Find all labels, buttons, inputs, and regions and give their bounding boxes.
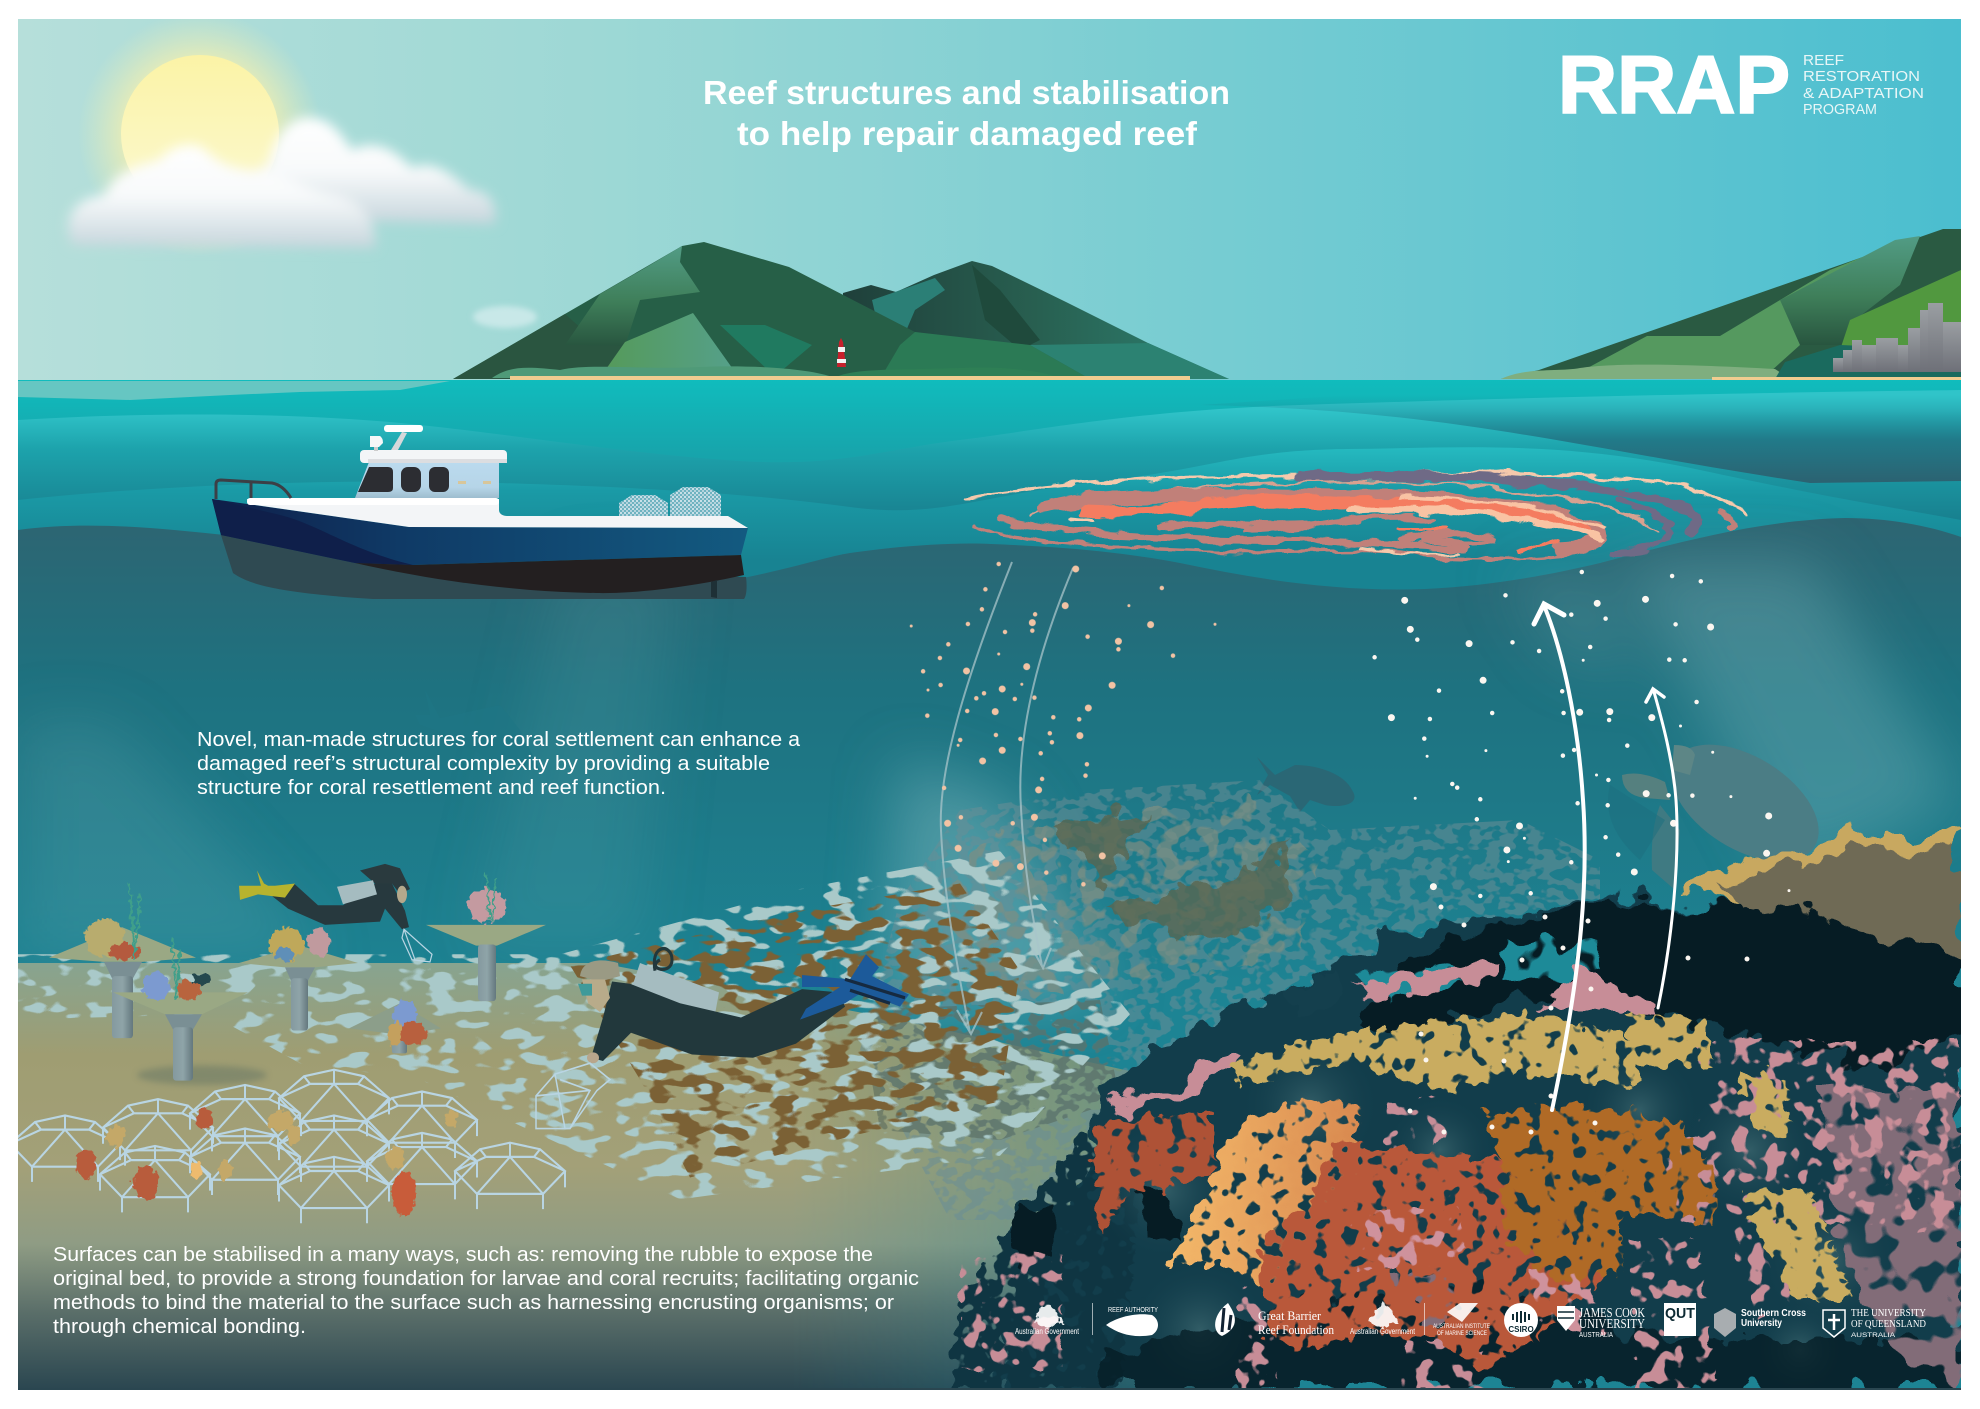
teal gap in reef: [1355, 940, 1600, 1000]
reef dark shadows: [1010, 905, 1961, 1390]
lighthouse: [837, 338, 846, 367]
logo: reef authority: [1106, 1307, 1158, 1336]
logo: James Cook University: UNIVERSITY: [1579, 1317, 1645, 1332]
reef lower-left speckled fringe: [950, 1130, 1140, 1390]
stern rail: [216, 480, 291, 499]
logo: Australian Institute of Marine Science: OF MARINE SCIENCE: [1437, 1330, 1487, 1337]
logo: University of Queensland: [1823, 1307, 1926, 1339]
yellow corals: [1230, 1013, 1852, 1300]
hoses: [654, 949, 672, 971]
peach coral spawn particles: [911, 564, 1215, 884]
logo wordmark: & ADAPTATION: [1803, 85, 1924, 102]
structure 3: [239, 927, 358, 1031]
distant rubble mound: [860, 780, 1600, 1230]
RRAP logo: RRAP: [1558, 40, 1790, 131]
pedestal structures: [49, 873, 546, 1085]
face: [397, 886, 407, 903]
deck: [247, 499, 748, 528]
wire sphere: [536, 1063, 610, 1129]
reef teal glows: [1095, 1035, 1900, 1400]
light rays: [18, 560, 1961, 1010]
logo: Southern Cross University: University: [1741, 1318, 1782, 1329]
body: [591, 982, 845, 1061]
logo wordmark: PROGRAM: [1803, 101, 1877, 118]
logo: Great Barrier Reef Foundation: [1215, 1303, 1334, 1337]
brown rubble patches: [570, 884, 1020, 1178]
logo: Great Barrier Reef Foundation: Great Barrier: [1258, 1308, 1322, 1323]
right island: [1501, 229, 1962, 380]
logo: CSIRO: CSIRO: [1508, 1325, 1534, 1334]
logo: James Cook University: JAMES COOK: [1579, 1306, 1645, 1321]
white particles over reef: [1410, 907, 1747, 1132]
light orange coral: [1170, 1100, 1360, 1290]
logo: Southern Cross University: Southern Cross: [1741, 1308, 1806, 1319]
cabin roof: [360, 450, 507, 463]
hand: [587, 1052, 599, 1063]
geodesic dome net: [10, 1070, 565, 1223]
pink spots on coral: [1350, 1210, 1610, 1340]
text: surface stabilisation: [53, 1244, 919, 1338]
orange corals: [1090, 1100, 1720, 1370]
far wave: [18, 390, 1961, 520]
logo: University of Queensland: OF QUEENSLAND: [1851, 1318, 1926, 1330]
logo: QUT: QUT: [1665, 1305, 1695, 1322]
bottom edge shade: [18, 1388, 1961, 1390]
logo: University of Queensland: AUSTRALIA: [1851, 1333, 1895, 1339]
hull: [212, 499, 748, 565]
sun: [88, 21, 311, 188]
structure 1: [49, 884, 196, 1038]
pink corals: [963, 962, 1961, 1390]
main red coral: [1260, 1140, 1610, 1370]
RRAP logo: [1558, 40, 1924, 131]
title: [703, 74, 1230, 152]
red orange coral left: [1090, 1110, 1214, 1235]
boat: [212, 425, 748, 599]
logo: University of Queensland: THE UNIVERSITY: [1851, 1307, 1926, 1319]
logo: Australian Government 2: [1350, 1303, 1416, 1336]
city skyline: [1833, 303, 1961, 372]
cabin: [355, 462, 499, 498]
hair and head: [580, 960, 620, 982]
fins: [800, 954, 909, 1020]
logo wordmark: REEF: [1803, 52, 1844, 69]
boat underwater shadow: [221, 535, 747, 599]
small diver: [239, 864, 432, 962]
logo wordmark: RESTORATION: [1803, 68, 1920, 85]
reef outcrop left: [1290, 965, 1350, 1030]
faint down arrows for coral spawn settlement: [941, 562, 1073, 1034]
tank: [337, 880, 377, 904]
underwater body: [18, 518, 1961, 1390]
mast and radar: [391, 432, 407, 450]
large upward arrow: [1534, 604, 1585, 1110]
logo: Australian Institute of Marine Science: AUSTRALIAN INSTITUTE: [1433, 1323, 1490, 1330]
logo: CSIRO: [1504, 1303, 1538, 1337]
logo: reef authority: REEF AUTHORITY: [1108, 1307, 1158, 1314]
sun reflection on water: [18, 381, 450, 400]
text: surface stabilisation: through chemical bonding.: [53, 1316, 306, 1338]
logo: Great Barrier Reef Foundation: Reef Foundation: [1258, 1322, 1334, 1337]
small corals on net: [76, 1107, 457, 1216]
text: surface stabilisation: methods to bind the material to the surface such as harnessing encrusting organisms; or: [53, 1292, 894, 1314]
mid wave: [18, 447, 1961, 544]
faint background shark: [415, 690, 540, 770]
bow panel: [212, 499, 413, 565]
rubble field, stretched to the seabed perspective: [18, 851, 1130, 1199]
propeller: [711, 580, 717, 598]
title: Reef structures and stabilisation: [703, 74, 1230, 111]
sky: [18, 19, 1961, 381]
hair: [360, 864, 410, 894]
text: novel structures: Novel, man-made structures for coral settlement can enhance a: [197, 729, 801, 751]
clouds: [68, 118, 496, 248]
structure 2: [113, 938, 267, 1085]
pale rubble patches: [18, 851, 1130, 1199]
tank: [632, 963, 719, 1014]
algal slick: [965, 473, 1748, 558]
body: [270, 884, 409, 929]
distant small cloud: [473, 306, 537, 328]
mauve coral: [1385, 1087, 1961, 1390]
sand seabed: [18, 963, 1260, 1390]
logo: QUT: [1664, 1303, 1696, 1336]
structure 4: [426, 873, 546, 1001]
small upward arrow: [1646, 689, 1677, 1008]
logo: Australian Institute of Marine Science: [1433, 1303, 1490, 1337]
logo: James Cook University: AUSTRALIA: [1579, 1332, 1613, 1339]
structure 5: [349, 1000, 441, 1053]
rear mountain: [840, 261, 1229, 379]
logo: Australian Government: Australian Government: [1015, 1327, 1080, 1336]
logo: Southern Cross University: [1714, 1308, 1806, 1337]
logo: Australian Government: [1015, 1303, 1080, 1336]
logo: James Cook University: [1557, 1306, 1645, 1339]
text: novel structures: damaged reef’s structural complexity by providing a suitable: [197, 753, 770, 775]
large diver: [536, 949, 909, 1129]
logo: Australian Government 2: Australian Government: [1350, 1327, 1416, 1336]
text: novel structures: structure for coral resettlement and reef function.: [197, 777, 666, 799]
title: to help repair damaged reef: [737, 115, 1198, 152]
gold brown coral: [1484, 1105, 1720, 1280]
khaki rock top right: [1690, 835, 1961, 955]
reef mass base: [1000, 890, 1961, 1390]
main island: [453, 242, 1229, 380]
text: surface stabilisation: original bed, to provide a strong foundation for larvae and coral recruits; facilitating organic: [53, 1268, 919, 1290]
mesh cages: [619, 495, 668, 516]
partner logos: [1015, 1303, 1926, 1339]
sea surface: [18, 380, 1961, 462]
text: novel structures: [197, 729, 801, 799]
white larvae particles: [1375, 572, 1789, 896]
hand-held wire frame: [402, 929, 432, 962]
fins: [239, 870, 295, 900]
logo wordmark: [1803, 52, 1924, 118]
turtle: [1608, 721, 1839, 890]
windows: [358, 467, 449, 492]
keel: [355, 555, 744, 593]
dark wave, top right: [1207, 402, 1961, 483]
text: surface stabilisation: Surfaces can be stabilised in a many ways, such as: removing the rubble to expose the: [53, 1244, 873, 1266]
faint fish: [1257, 757, 1355, 812]
